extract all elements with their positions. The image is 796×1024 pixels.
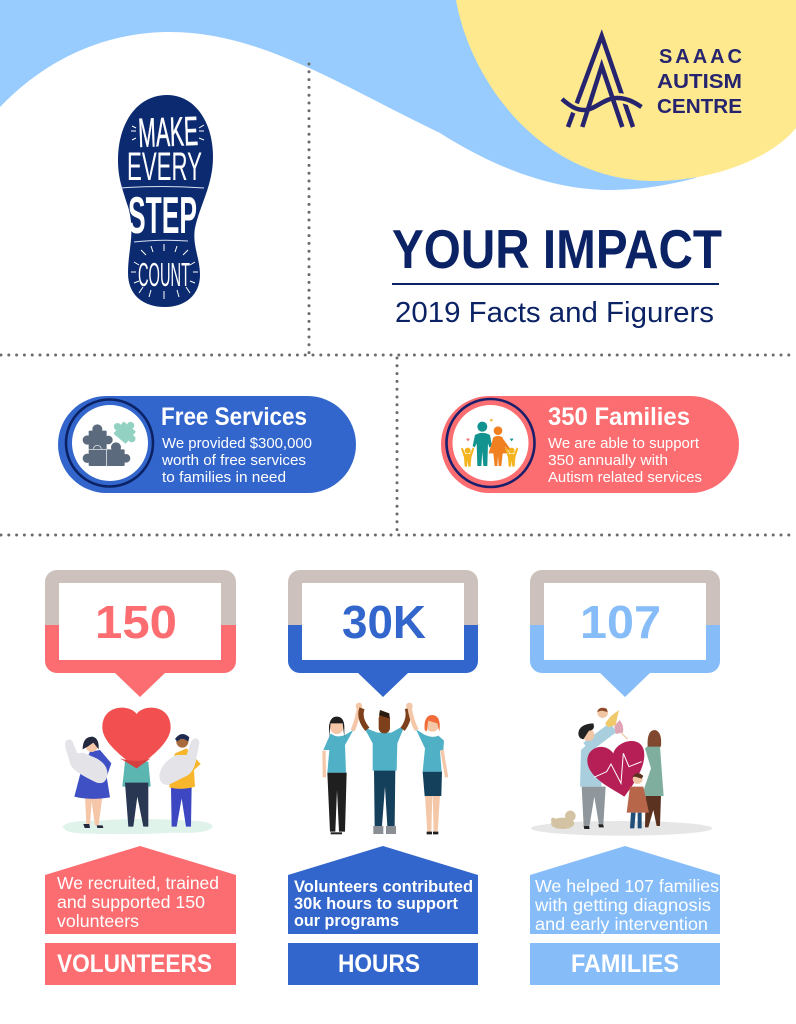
logo mark — [562, 36, 642, 127]
title: YOUR IMPACT — [392, 218, 722, 280]
body text — [548, 436, 702, 486]
footprint badge: Make Every Step Count — [118, 95, 213, 307]
logo wordmark: CENTRE — [657, 96, 742, 118]
pill background — [441, 396, 739, 493]
body text: We are able to support — [548, 436, 699, 452]
icon: family — [446, 399, 534, 487]
callout frame — [530, 570, 720, 625]
description text: our programs — [294, 912, 399, 930]
label bar — [288, 943, 478, 985]
footprint shape — [118, 95, 213, 307]
title rule — [392, 283, 719, 285]
illustration: volunteers with heart — [63, 708, 213, 834]
stat card: 30K hours — [288, 570, 478, 985]
description text — [57, 873, 219, 931]
description text — [294, 878, 473, 930]
body text: 350 annually with — [548, 453, 668, 469]
illustration: family with heart — [531, 707, 712, 836]
heading: Free Services — [161, 403, 307, 431]
label: VOLUNTEERS — [57, 950, 212, 978]
icon: puzzle pieces — [66, 400, 153, 486]
illustration: three volunteers raising hands — [323, 703, 447, 834]
body text — [161, 436, 312, 486]
logo: SAAAC Autism Centre — [562, 36, 742, 127]
heading: 350 Families — [548, 403, 690, 431]
logo wordmark: AUTISM — [657, 71, 742, 93]
logo wordmark: SAAAC — [659, 46, 742, 68]
badge lettering — [120, 108, 204, 299]
title block — [392, 218, 722, 329]
badge lettering: MAKE — [137, 108, 199, 156]
number: 150 — [95, 596, 177, 648]
label bar — [45, 943, 236, 985]
description text: and early intervention — [535, 914, 708, 934]
description house — [45, 846, 236, 934]
description text: and supported 150 — [57, 892, 205, 912]
description text: with getting diagnosis — [534, 895, 711, 915]
body text: We provided $300,000 — [162, 436, 312, 452]
pill background — [58, 396, 356, 493]
description text: Volunteers contributed — [294, 878, 473, 896]
description text: We helped 107 families — [535, 876, 719, 896]
body text: Autism related services — [548, 470, 702, 486]
description text: volunteers — [57, 911, 139, 931]
label: HOURS — [338, 950, 420, 978]
description text: 30k hours to support — [294, 895, 458, 913]
badge lettering: EVERY — [127, 145, 202, 189]
callout frame — [45, 570, 236, 625]
subtitle: 2019 Facts and Figurers — [395, 297, 714, 329]
badge lettering: COUNT — [138, 256, 190, 293]
panel: 350 families — [441, 396, 739, 493]
stat card: 107 families — [530, 570, 720, 985]
number: 107 — [580, 596, 661, 648]
description text — [534, 876, 719, 934]
number: 30K — [342, 596, 426, 648]
description house — [288, 846, 478, 934]
badge lettering: STEP — [128, 187, 197, 245]
callout frame — [288, 570, 478, 625]
label bar — [530, 943, 720, 985]
stat card: 150 volunteers — [45, 570, 236, 985]
header background: yellow circle — [456, 0, 796, 181]
header background: blue wave — [0, 0, 796, 190]
logo wordmark — [657, 46, 742, 118]
label: FAMILIES — [571, 950, 679, 978]
panel: free services — [58, 396, 356, 493]
body text: worth of free services — [161, 453, 306, 469]
description text: We recruited, trained — [57, 873, 219, 893]
body text: to families in need — [162, 470, 286, 486]
description house — [530, 846, 720, 934]
